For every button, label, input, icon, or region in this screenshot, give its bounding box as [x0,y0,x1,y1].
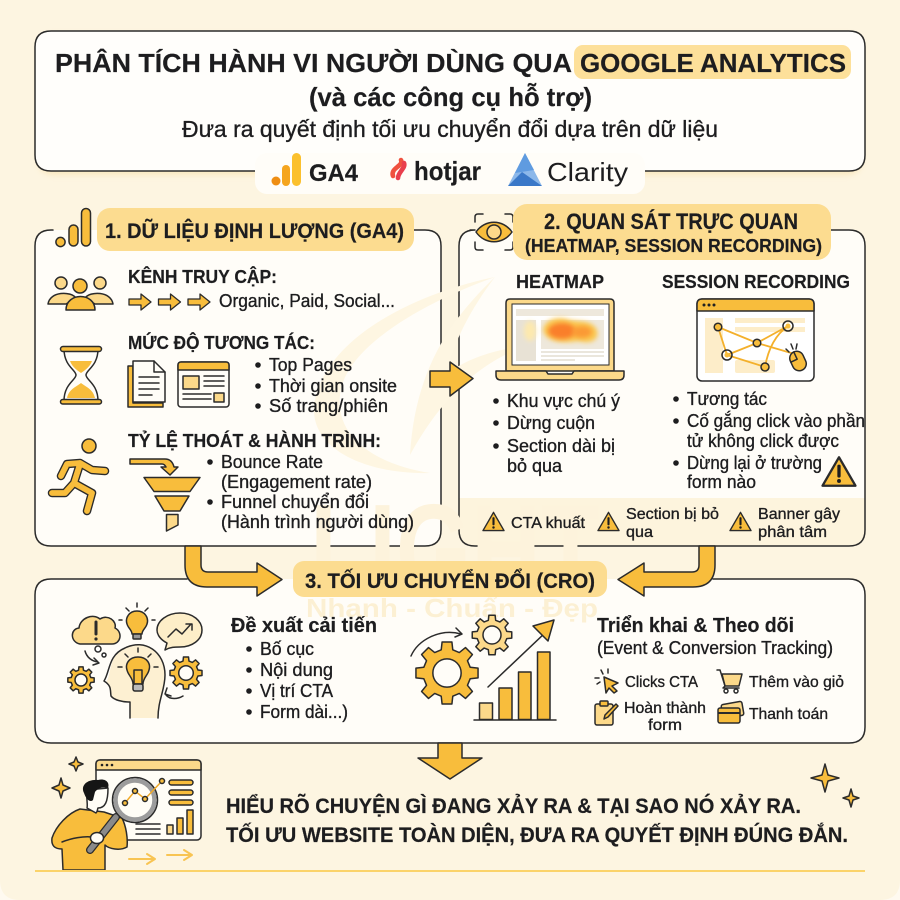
watermark: LIGHT [310,477,600,624]
section 1 heading: 1. DỮ LIỆU ĐỊNH LƯỢNG (GA4) [105,219,404,243]
hotjar label: hotjar [414,156,481,186]
warning: distracting banner: phân tâm [758,524,827,541]
bullets: Khu vực chú ý [507,391,620,411]
icon: magnifier [90,778,164,850]
icon: small arrows [129,850,192,864]
arrow: CRO to conclusion [418,743,482,779]
icon: GA4 bars [272,153,301,186]
bullets: Dừng cuộn [507,413,595,433]
heading: MỨC ĐỘ TƯƠNG TÁC: [128,332,315,353]
event: CTA clicks: Clicks CTA [625,674,698,691]
conclusion text [226,794,848,847]
panel: CRO [35,579,865,743]
icon: left gear [68,667,94,693]
block: implementation and tracking: (Event & Conversion Tracking) [597,638,833,658]
event: form completed: form [648,717,682,734]
bullets: Vị trí CTA [260,681,333,701]
icon: people [48,277,113,310]
block: improvement suggestions [231,615,377,722]
warning: CTA hidden [483,512,586,532]
channel list: Organic, Paid, Social... [219,291,395,311]
section 2 heading: (HEATMAP, SESSION RECORDING) [525,236,822,256]
title heading: PHÂN TÍCH HÀNH VI NGƯỜI DÙNG QUA [55,48,572,78]
event: CTA clicks [595,669,698,693]
heading: HEATMAP [516,272,604,292]
icon: right gear [170,657,202,689]
icon: laptop heatmap [496,299,624,380]
heading: TỶ LỆ THOÁT & HÀNH TRÌNH: [128,430,381,451]
icon: large gear [416,642,478,704]
bullets [207,452,414,532]
warning: distracting banner [730,506,840,541]
arrow: panel 2 to CRO [618,546,715,596]
bullets: Form dài...) [260,702,348,722]
icon: documents [128,361,165,407]
bullets [493,391,620,476]
bullets: form nào [687,472,756,492]
bullets: (Engagement rate) [221,472,372,492]
item: engagement [60,332,397,416]
warning: section skipped: Section bị bỏ [626,506,719,523]
bullets [246,639,348,722]
panel: visual observation [459,230,865,546]
icon: cloud [72,616,120,665]
conclusion text: TỐI ƯU WEBSITE TOÀN DIỆN, ĐƯA RA QUYẾT ĐỊNH ĐÚNG ĐẮN. [226,823,848,847]
icon: sparkles left [52,757,83,798]
bullets: Funnel chuyển đổi [221,492,369,512]
bullets: Bố cục [260,639,314,659]
section 2 heading [475,204,831,260]
warning: distracting banner: Banner gây [758,506,840,523]
watermark [306,277,600,624]
bullets: Thời gian onsite [269,376,397,396]
event: add to cart: Thêm vào giỏ [749,674,844,691]
bullets: Nội dung [260,660,333,680]
icon: runner [52,439,105,511]
warning: CTA hidden: CTA khuất [511,515,586,532]
bullets: Top Pages [269,355,352,375]
column: session recording [662,272,865,492]
icon: funnel [130,459,200,531]
section 2 heading: 2. QUAN SÁT TRỰC QUAN [544,209,798,234]
heading: SESSION RECORDING [662,272,850,292]
item: traffic channels [48,266,395,311]
arrow: growth [488,620,554,687]
bullets: Section dài bị [507,436,615,456]
watermark: Nhanh - Chuẩn - Đẹp [306,593,598,623]
block: implementation and tracking [595,615,844,734]
icon: head with bulb [104,645,183,718]
section 1 heading [56,208,414,251]
bullets: Cố gắng click vào phần [687,410,865,431]
icon: eye [475,214,513,250]
event: form completed [595,700,706,734]
subtitle: (và các công cụ hỗ trợ) [309,82,592,112]
bullets: bỏ qua [507,456,563,476]
footer rule [35,870,865,872]
icon: dashboard window [96,760,201,840]
bullets: Số trang/phiên [269,396,388,416]
warning: section skipped: qua [626,524,653,541]
heading: KÊNH TRUY CẬP: [128,266,277,287]
arrow: panel 1 to panel 2 [430,362,473,396]
icon: speech bubble chart [157,613,202,650]
bullets: Tương tác [687,389,767,409]
item: bounce and journey [52,430,414,532]
bar chart [474,652,556,720]
event: form completed: Hoàn thành [624,700,706,717]
icon: hotjar [393,160,404,178]
title heading [55,48,846,78]
icon: small gear [472,615,512,655]
icon: session window [697,299,814,381]
illustration: analyst with magnifier [52,757,201,870]
Clarity label: Clarity [547,157,628,187]
icon: top bulb [119,603,155,639]
section 3 heading [293,561,607,597]
section 3 heading: 3. TỐI ƯU CHUYỂN ĐỔI (CRO) [305,569,595,593]
icon: Clarity [508,153,542,186]
event: add to cart [717,670,844,693]
conclusion text: HIỂU RÕ CHUYỆN GÌ ĐANG XẢY RA & TẠI SAO NÓ XẢY RA. [226,794,801,818]
person [52,780,127,870]
bullets [673,389,865,492]
tagline: Đưa ra quyết định tối ưu chuyển đổi dựa trên dữ liệu [182,116,718,142]
arrow: panel 1 to CRO [185,546,282,596]
icon: webpage [178,362,229,407]
tool logos strip [255,153,645,194]
bullets: (Hành trình người dùng) [221,512,414,532]
illustration: improvement ideas [68,603,202,718]
warnings row [483,506,840,541]
GA4 label: GA4 [309,160,359,187]
arrows [129,294,210,310]
panel: title [35,31,865,175]
title heading: GOOGLE ANALYTICS [580,48,846,78]
icon: sparkles right [811,764,859,807]
illustration: gears and growth chart [411,615,556,720]
block: implementation and tracking: Triển khai & Theo dõi [597,615,794,637]
icon: GA bars [56,208,90,247]
bullets: Bounce Rate [221,452,323,472]
event: payment [718,701,828,723]
event: payment: Thanh toán [749,706,828,723]
warning: section skipped [598,506,719,541]
bullets: tử không click được [687,431,839,451]
block: improvement suggestions: Đề xuất cải tiến [231,615,377,637]
panel: quantitative data [35,230,441,546]
bullets [255,355,397,416]
column: heatmap [493,272,624,476]
icon: hourglass [60,346,102,404]
icon: large warning [822,457,856,486]
bullets: Dừng lại ở trường [687,453,822,473]
